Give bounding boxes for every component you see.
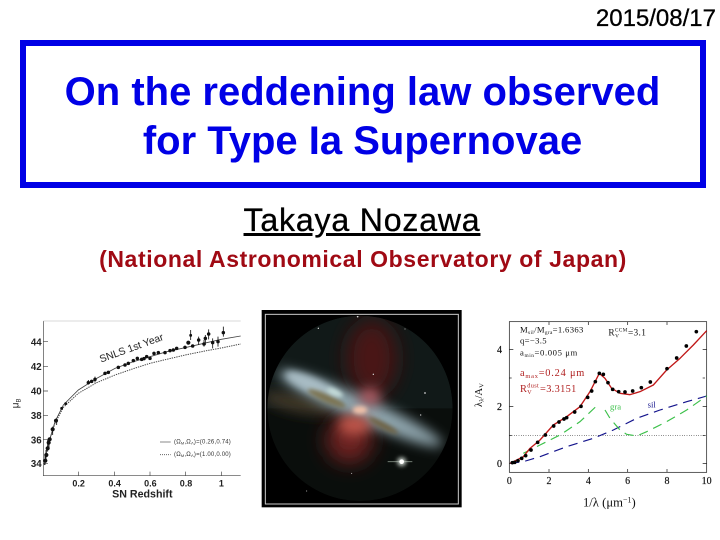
title: On the reddening law observed — [65, 70, 660, 114]
model curves — [44, 336, 241, 465]
x axis labels: 0.6 — [144, 479, 157, 489]
x axis labels: 4 — [586, 476, 591, 487]
y axis labels: 42 — [31, 362, 42, 373]
x axis labels: 0.2 — [72, 479, 85, 489]
legend: (Ω — [174, 452, 181, 458]
legend: ,Ω — [184, 452, 191, 458]
x axis labels: 0.4 — [108, 479, 121, 489]
legend: M — [181, 453, 184, 458]
graphite curve — [523, 396, 707, 453]
y axis labels — [497, 345, 502, 470]
model parameter labels: M — [520, 324, 528, 334]
chart: extinction curve — [474, 321, 712, 510]
model parameter labels: q=−3.5 — [520, 335, 547, 345]
y axis labels: 2 — [497, 402, 502, 413]
fit result labels: V — [527, 389, 532, 396]
model parameter labels: V — [615, 333, 619, 339]
x axis labels: 10 — [702, 476, 712, 487]
x axis title: −1 — [623, 495, 631, 504]
silicate label: sil — [648, 399, 656, 409]
model parameter labels: /M — [534, 324, 545, 334]
legend: Λ — [191, 453, 194, 458]
model parameter labels — [520, 324, 646, 359]
model parameter labels: =1.6363 — [553, 324, 584, 334]
legend: ,Ω — [184, 440, 191, 446]
y axis labels: 40 — [31, 387, 42, 398]
galaxy disc — [261, 316, 453, 501]
y axis title: λ — [474, 402, 485, 407]
y axis title: λ — [479, 398, 486, 402]
axes frame — [43, 321, 241, 476]
x axis labels — [72, 479, 224, 489]
legend: (Ω — [174, 440, 181, 446]
date: 2015/08/17 — [596, 5, 716, 32]
model parameter labels: a — [520, 347, 524, 357]
x axis labels: 1 — [219, 479, 224, 489]
silicate curve — [510, 396, 707, 463]
y axis title: /A — [474, 388, 485, 399]
supernova data points — [44, 327, 225, 465]
y axis title: V — [479, 383, 486, 388]
legend — [160, 440, 231, 458]
legend: )=(1.00,0.00) — [194, 452, 231, 458]
y axis title: B — [16, 398, 22, 402]
y axis labels — [31, 337, 42, 470]
title: for Type Ia Supernovae — [143, 119, 582, 163]
y axis labels: 36 — [31, 435, 42, 446]
y axis labels: 34 — [31, 459, 42, 470]
field stars — [306, 316, 426, 492]
y axis labels: 38 — [31, 411, 42, 422]
legend: Λ — [191, 441, 194, 446]
legend: )=(0.26,0.74) — [194, 440, 231, 446]
model parameter labels: min — [524, 353, 535, 359]
x axis title: 1/λ (μm — [583, 496, 623, 510]
y axis title: μ — [11, 402, 22, 408]
x axis labels: 2 — [546, 476, 552, 487]
fit result labels: max — [525, 373, 539, 380]
model parameter labels: CCM — [615, 328, 628, 334]
x axis labels: 8 — [664, 476, 670, 487]
x axis title: ) — [631, 496, 636, 510]
fit result labels: R — [520, 384, 527, 395]
y axis labels: 0 — [497, 459, 502, 470]
title — [65, 70, 660, 163]
x axis labels: 0.8 — [180, 479, 192, 489]
fit result labels: a — [520, 368, 525, 379]
photo: galaxy M82 — [262, 310, 462, 508]
chart: Hubble diagram — [11, 320, 241, 501]
x axis labels: 0 — [507, 476, 512, 487]
fit result labels: =3.3151 — [540, 384, 577, 395]
graphite label: gra — [610, 401, 621, 411]
fit result labels — [520, 368, 585, 396]
y axis labels: 44 — [31, 337, 42, 348]
y axis labels: 4 — [497, 345, 502, 356]
affiliation: (National Astronomical Observatory of Japan) — [99, 246, 627, 272]
x axis labels: 6 — [625, 476, 630, 487]
model parameter labels: sil — [528, 330, 534, 336]
fit result labels: =0.24 μm — [539, 368, 585, 379]
model parameter labels: gra — [545, 330, 553, 336]
observed data points — [510, 330, 698, 464]
model parameter labels: R — [608, 328, 615, 338]
model parameter labels: =3.1 — [628, 328, 646, 338]
bright foreground star — [388, 457, 412, 466]
total model curve — [510, 331, 707, 463]
axes frame and ticks — [509, 322, 707, 472]
legend: M — [181, 441, 184, 446]
photo frame line — [265, 314, 458, 504]
fit result labels: dust — [527, 383, 539, 390]
model parameter labels: =0.005 μm — [535, 347, 578, 357]
dotted reference line — [509, 434, 707, 436]
author name: Takaya Nozawa — [244, 202, 480, 238]
title box — [20, 40, 706, 188]
x axis labels — [507, 476, 712, 487]
black background — [262, 310, 462, 507]
x axis title: SN Redshift — [112, 489, 173, 501]
curve annotation: SNLS 1st Year — [98, 332, 166, 365]
